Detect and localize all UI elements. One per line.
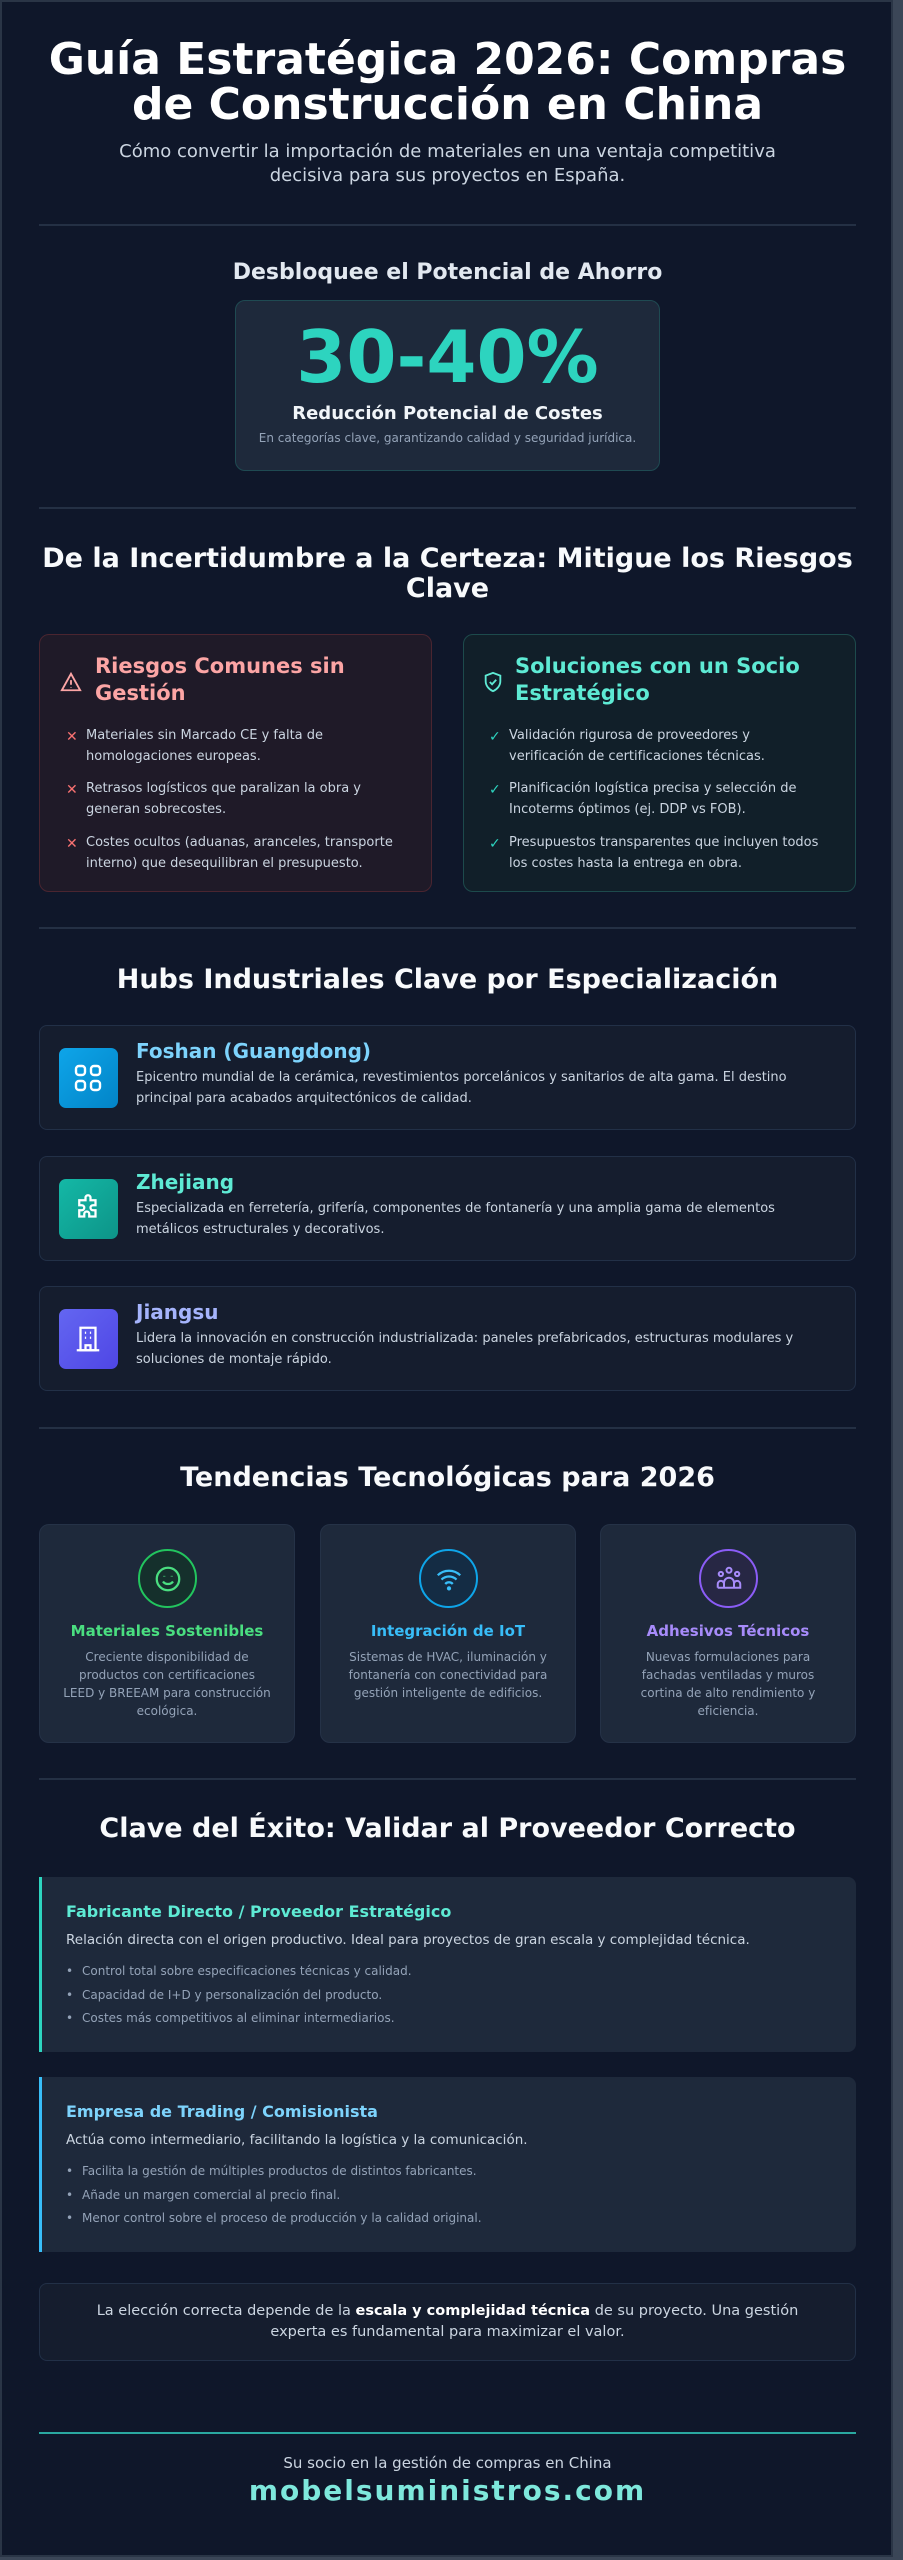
card: trading company: Facilita la gestión de múltiples productos de distintos fabricantes.	[82, 2164, 477, 2178]
heading: hubs: Hubs Industriales Clave por Especialización	[117, 964, 778, 995]
hub: Foshan	[39, 1025, 856, 1130]
trend: adhesives: cortina de alto rendimiento y	[641, 1686, 815, 1700]
solutions heading: Soluciones con un Socio	[515, 654, 800, 678]
stat box	[235, 300, 660, 471]
subtitle	[119, 141, 776, 186]
panel: solutions	[463, 634, 856, 892]
hub: Zhejiang	[39, 1156, 856, 1261]
solution items: Validación rigurosa de proveedores y	[509, 728, 750, 743]
icon: puzzle	[59, 1179, 118, 1239]
risks heading	[95, 654, 345, 705]
hub: Jiangsu: Jiangsu	[136, 1300, 218, 1324]
heading: supplier: Clave del Éxito: Validar al Proveedor Correcto	[99, 1813, 796, 1844]
trend: IoT: gestión inteligente de edificios.	[354, 1686, 542, 1700]
footer	[249, 2454, 646, 2507]
hub: Foshan: principal para acabados arquitectónicos de calidad.	[136, 1091, 472, 1106]
heading: risks	[42, 543, 853, 604]
trend: sustainable: ecológica.	[137, 1704, 197, 1718]
callout: conclusion: La elección correcta depende de la escala y complejidad técnica de su proyecto. Una gestión	[97, 2303, 798, 2319]
solutions heading	[515, 654, 800, 705]
icon: shield	[484, 672, 502, 692]
hub: Zhejiang: metálicos estructurales y decorativos.	[136, 1222, 384, 1237]
card: direct manufacturer: Capacidad de I+D y personalización del producto.	[82, 1988, 382, 2002]
card: trading company: Empresa de Trading / Comisionista	[66, 2102, 378, 2121]
hub: Zhejiang: Zhejiang	[136, 1170, 234, 1194]
hub: Jiangsu: Lidera la innovación en construcción industrializada: paneles prefabricados, estructuras modulares y	[136, 1331, 793, 1346]
subtitle: Cómo convertir la importación de materiales en una ventaja competitiva	[119, 141, 776, 162]
card: trading company	[39, 2077, 856, 2252]
risk items: generan sobrecostes.	[86, 802, 226, 817]
card: direct manufacturer: Relación directa con el origen productivo. Ideal para proyectos de gran escala y complejidad técnica.	[66, 1932, 750, 1948]
solution items: verificación de certificaciones técnicas.	[509, 749, 765, 764]
trend: IoT: Integración de IoT	[371, 1622, 525, 1640]
card: direct manufacturer: Control total sobre especificaciones técnicas y calidad.	[82, 1964, 412, 1978]
solution items: Incoterms óptimos (ej. DDP vs FOB).	[509, 802, 746, 817]
solution items: Planificación logística precisa y selección de	[509, 781, 796, 796]
hub: Jiangsu: soluciones de montaje rápido.	[136, 1352, 332, 1367]
risk items: interno) que desequilibran el presupuesto.	[86, 856, 363, 871]
trend: sustainable: Creciente disponibilidad de	[85, 1650, 249, 1664]
footer: mobelsuministros.com	[249, 2474, 646, 2507]
icon: warning	[60, 672, 82, 692]
hub: Zhejiang: Especializada en ferretería, grifería, componentes de fontanería y una amplia gama de elementos	[136, 1201, 775, 1216]
callout: conclusion: experta es fundamental para maximizar el valor.	[270, 2324, 625, 2340]
trend: sustainable: productos con certificaciones	[79, 1668, 255, 1682]
title	[49, 34, 846, 130]
big stat: 30-40%	[296, 315, 599, 399]
solution items: Presupuestos transparentes que incluyen todos	[509, 835, 818, 850]
heading: trends: Tendencias Tecnológicas para 2026	[180, 1462, 715, 1493]
trend: IoT	[320, 1524, 576, 1743]
risk items: Costes ocultos (aduanas, aranceles, transporte	[86, 835, 393, 850]
hub: Foshan: Foshan (Guangdong)	[136, 1039, 371, 1063]
panel: solutions: ✓	[489, 782, 501, 798]
trend: adhesives: fachadas ventiladas y muros	[642, 1668, 814, 1682]
risk items	[66, 728, 393, 871]
stat note: En categorías clave, garantizando calidad y seguridad jurídica.	[259, 431, 636, 445]
icon: smile	[138, 1549, 197, 1608]
solutions heading: Estratégico	[515, 681, 650, 705]
panel: risks: ✕	[66, 836, 78, 852]
solution items	[489, 728, 818, 871]
risk items: Retrasos logísticos que paralizan la obra y	[86, 781, 361, 796]
trend: sustainable: Materiales Sostenibles	[71, 1622, 263, 1640]
stat label: Reducción Potencial de Costes	[292, 403, 603, 424]
heading: savings: Desbloquee el Potencial de Ahorro	[233, 260, 662, 285]
panel: solutions: ✓	[489, 836, 501, 852]
risks heading: Riesgos Comunes sin	[95, 654, 345, 678]
panel: risks: ✕	[66, 782, 78, 798]
callout: conclusion	[39, 2283, 856, 2361]
trend: IoT: Sistemas de HVAC, iluminación y	[349, 1650, 547, 1664]
hub: Foshan: Epicentro mundial de la cerámica, revestimientos porcelánicos y sanitarios de alta gama. El destino	[136, 1070, 787, 1085]
trend: adhesives	[600, 1524, 856, 1743]
icon: people	[699, 1549, 758, 1608]
trend: adhesives: eficiencia.	[698, 1704, 758, 1718]
solution items: los costes hasta la entrega en obra.	[509, 856, 742, 871]
title: de Construcción en China	[132, 79, 763, 130]
heading: risks: De la Incertidumbre a la Certeza: Mitigue los Riesgos	[42, 543, 853, 574]
risks heading: Gestión	[95, 681, 186, 705]
risk items: Materiales sin Marcado CE y falta de	[86, 728, 323, 743]
panel: risks	[39, 634, 432, 892]
trend: IoT: fontanería con conectividad para	[349, 1668, 547, 1682]
panel: solutions: ✓	[489, 729, 501, 745]
footer: Su socio en la gestión de compras en China	[283, 2454, 612, 2472]
trend: adhesives: Nuevas formulaciones para	[646, 1650, 810, 1664]
trend: sustainable: LEED y BREEAM para construcción	[63, 1686, 271, 1700]
card: direct manufacturer: Costes más competitivos al eliminar intermediarios.	[82, 2011, 395, 2025]
heading: risks: Clave	[406, 573, 489, 604]
icon: grid	[59, 1048, 118, 1108]
icon: wifi	[419, 1549, 478, 1608]
risk items: homologaciones europeas.	[86, 749, 261, 764]
subtitle: decisiva para sus proyectos en España.	[270, 165, 625, 186]
card: trading company: Añade un margen comercial al precio final.	[82, 2188, 340, 2202]
icon: building	[59, 1309, 118, 1369]
card: trading company: Actúa como intermediario, facilitando la logística y la comunicación.	[66, 2132, 528, 2148]
card: trading company: Menor control sobre el proceso de producción y la calidad original.	[82, 2211, 482, 2225]
card: direct manufacturer: Fabricante Directo / Proveedor Estratégico	[66, 1902, 451, 1921]
trend: sustainable	[39, 1524, 295, 1743]
trend: adhesives: Adhesivos Técnicos	[647, 1622, 809, 1640]
panel: risks: ✕	[66, 729, 78, 745]
hub: Jiangsu	[39, 1286, 856, 1391]
title: Guía Estratégica 2026: Compras	[49, 34, 846, 85]
card: direct manufacturer	[39, 1877, 856, 2052]
